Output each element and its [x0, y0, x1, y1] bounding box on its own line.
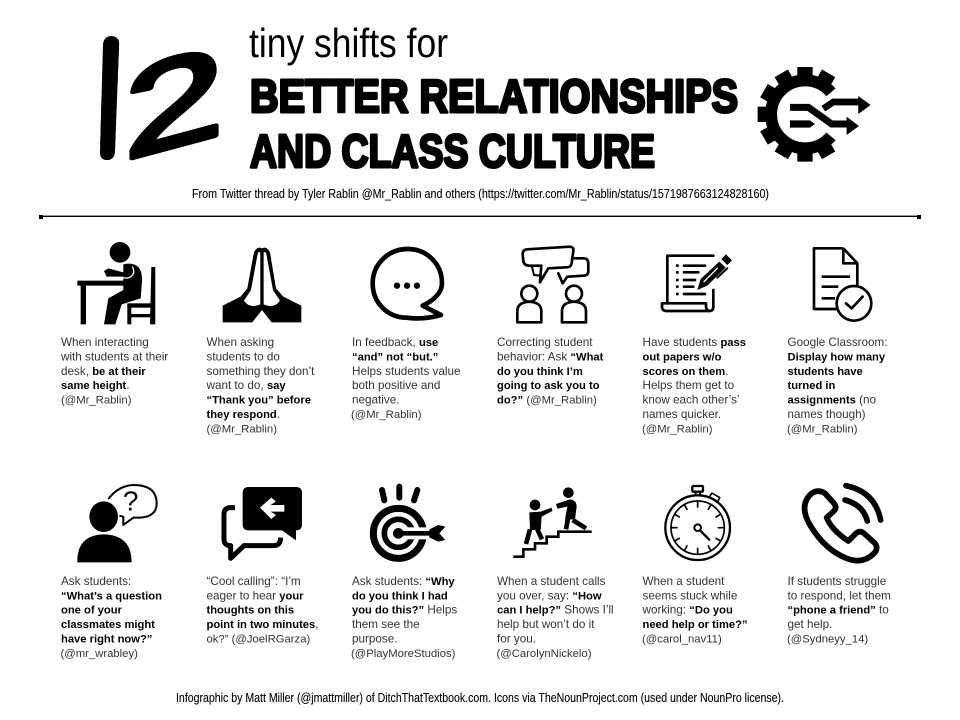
text: negative. — [352, 394, 399, 407]
source line: From Twitter thread by Tyler Rablin @Mr_Rablin and others (https://twitter.com/Mr_Rablin/status/1571987663124828160) — [192, 187, 769, 201]
text: thoughts on this — [206, 605, 294, 617]
text: (@Mr_Rablin) — [206, 423, 277, 435]
text: they respond. — [206, 408, 280, 421]
text: When a student — [642, 575, 725, 588]
text: classmates might — [61, 619, 155, 631]
text: Correcting student — [497, 336, 593, 349]
text: out papers w/o — [642, 351, 722, 363]
text: (@carol_nav11) — [642, 633, 722, 645]
text: When interacting — [61, 336, 149, 349]
text: students to do — [206, 350, 280, 363]
icon: person with question bubble: ? — [123, 486, 138, 517]
card 12: phone a friend — [787, 486, 891, 645]
text: . — [126, 379, 130, 392]
text: turned in — [788, 380, 836, 392]
text: (@Mr_Rablin) — [787, 423, 858, 435]
text: can I help?” Shows I’ll — [497, 604, 614, 617]
text: “Cool calling”: “I’m — [206, 575, 301, 588]
text: you do this?” Helps — [352, 604, 457, 617]
icon: stopwatch — [665, 486, 730, 560]
card 4: correcting behavior — [497, 247, 604, 407]
big number 12 — [100, 36, 219, 160]
header — [100, 28, 870, 200]
text: names though) — [788, 408, 866, 421]
text: eager to hear your — [206, 589, 304, 602]
card 6: google classroom — [787, 248, 888, 435]
text: to respond, let them — [788, 589, 891, 602]
big number 12: 2 — [124, 17, 224, 187]
text: When a student calls — [497, 575, 606, 588]
text: them see the — [352, 618, 420, 631]
icon: target with arrow — [373, 487, 447, 558]
icon: paper and pen — [662, 254, 732, 311]
card 10: how can I help — [496, 487, 614, 660]
card 2: say thank you — [206, 248, 315, 435]
text: need help or time?” — [642, 619, 748, 631]
card 3: and not but — [351, 249, 460, 421]
text: students have — [788, 366, 863, 378]
text: “and” not “but.” — [352, 351, 438, 363]
icon: person with question bubble — [77, 485, 157, 562]
text: Helps them get to — [642, 379, 735, 392]
text: seems stuck while — [642, 589, 737, 602]
text: do you think I’m — [497, 366, 583, 378]
text: do?” (@Mr_Rablin) — [497, 395, 597, 407]
text: scores on them. — [642, 365, 728, 378]
text: (@Mr_Rablin) — [642, 423, 713, 435]
text: get help. — [788, 618, 832, 631]
text: one of your — [61, 605, 123, 617]
icon: praying hands — [223, 248, 301, 322]
icon: document with check — [814, 248, 871, 321]
text: with students at their — [60, 350, 168, 363]
text: If students struggle — [788, 575, 886, 588]
text: both positive and — [352, 379, 440, 392]
text: Ask students: — [61, 575, 131, 588]
text: (@Mr_Rablin) — [351, 409, 422, 421]
text: “Thank you” before — [206, 395, 311, 407]
text: you over, say: “How — [497, 589, 602, 602]
text: behavior: Ask “What — [497, 350, 603, 363]
text: (@Sydneyy_14) — [787, 633, 868, 645]
icon: person at desk — [77, 242, 155, 324]
text: have right now?” — [61, 633, 152, 645]
text: “phone a friend” to — [788, 604, 889, 617]
text: something they don’t — [206, 365, 315, 378]
text: Display how many — [788, 351, 886, 363]
text: In feedback, use — [352, 336, 438, 349]
text: want to do, say — [206, 379, 286, 392]
card 5: pass out papers — [642, 254, 746, 435]
text: assignments (no — [788, 394, 876, 407]
text: help but won’t do it — [497, 618, 595, 631]
title: and class culture: AND CLASS CULTURE — [250, 125, 655, 177]
icon: chat bubbles with arrow — [224, 487, 302, 558]
text: going to ask you to — [497, 380, 600, 392]
text: (@Mr_Rablin) — [61, 395, 132, 407]
text: Helps students value — [352, 365, 460, 378]
card 7: classmates question — [60, 485, 162, 660]
text: Google Classroom: — [788, 336, 888, 349]
card 11: help or time — [642, 486, 748, 645]
text: names quicker. — [642, 408, 721, 421]
text: (@mr_wrabley) — [60, 648, 138, 660]
footer credit: Infographic by Matt Miller (@jmattmiller) of DitchThatTextbook.com. Icons via TheNounProject.com (used under NounPro license). — [176, 691, 784, 705]
text: ok?” (@JoelRGarza) — [206, 633, 310, 645]
text: When asking — [206, 336, 274, 349]
card 1: same height — [60, 242, 168, 407]
card 9: why — [351, 487, 457, 660]
text: Have students pass — [642, 336, 746, 349]
text: for you. — [497, 632, 536, 645]
title: better relationships: BETTER RELATIONSHIPS — [250, 70, 738, 122]
icon: helping up stairs — [513, 487, 592, 557]
icon: phone — [805, 486, 881, 561]
icon: two people talking — [517, 247, 588, 322]
text: do you think I had — [352, 590, 448, 602]
text: working: “Do you — [642, 604, 733, 617]
text: purpose. — [352, 632, 397, 645]
text: know each other’s’ — [642, 394, 740, 407]
text: (@PlayMoreStudios) — [351, 648, 456, 660]
text: desk, be at their — [61, 365, 146, 378]
text: same height — [61, 380, 127, 392]
text: point in two minutes, — [206, 618, 319, 631]
text: “What’s a question — [61, 590, 162, 602]
title: tiny shifts for: tiny shifts for — [249, 20, 448, 66]
icon: gear with shuffle arrows — [758, 67, 871, 162]
text: Ask students: “Why — [352, 575, 455, 588]
icon: speech bubble — [373, 249, 442, 318]
text: (@CarolynNickelo) — [496, 648, 592, 660]
card 8: cool calling — [206, 487, 319, 645]
